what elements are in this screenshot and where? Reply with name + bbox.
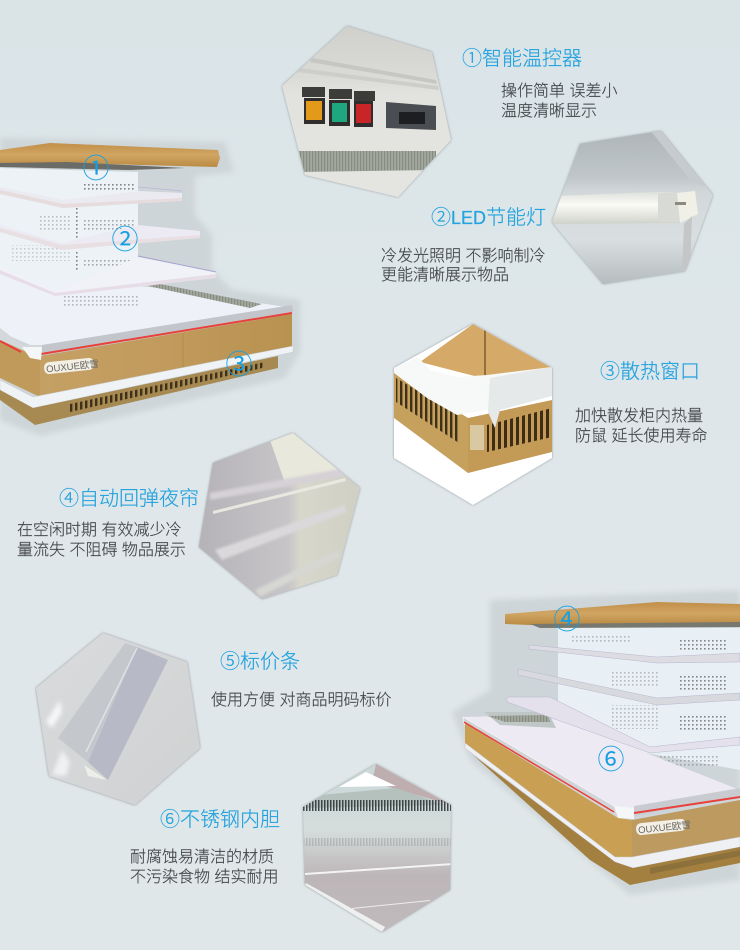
- cabinet photo: right view with markers 4, 6: ⑥: [598, 745, 624, 775]
- cabinet photo: left view with markers 1, 2, 3: ①: [82, 154, 110, 184]
- photo hexagon 3: gold vented heat-dissipation corner: [392, 322, 554, 507]
- feature 2: LED energy-saving light: 冷发光照明 不影响制冷: [381, 247, 545, 265]
- photo hexagon 4: self-rebounding night curtain: [196, 430, 364, 602]
- cabinet photo: left view with markers 1, 2, 3: ②: [112, 225, 138, 255]
- logo: OUXUE: OUXUE欧雪: [46, 358, 99, 375]
- photo hexagon 1: thermostat control panel: [280, 24, 455, 199]
- feature 2: LED energy-saving light: 更能清晰展示物品: [381, 266, 509, 284]
- feature 3: heat dissipation vent: [575, 360, 707, 445]
- feature 4: self-rebounding night curtain: [17, 487, 199, 559]
- digital temperature controller: [386, 102, 436, 130]
- feature 3: heat dissipation vent: 加快散发柜内热量: [575, 407, 703, 425]
- feature 5: price tag strip: ⑤标价条: [220, 650, 300, 673]
- feature 4: self-rebounding night curtain: 在空闲时期 有效减少冷: [17, 521, 181, 539]
- photo hexagon 5: price tag strip: [34, 630, 204, 808]
- cabinet photo: right view with markers 4, 6: [452, 590, 740, 895]
- feature 6: stainless steel liner: ⑥不锈钢内胆: [160, 808, 280, 831]
- feature 1: smart thermostat: 操作简单 误差小: [501, 82, 617, 100]
- feature 1: smart thermostat: ①智能温控器: [462, 47, 582, 70]
- feature 3: heat dissipation vent: 防鼠 延长使用寿命: [575, 427, 707, 445]
- cabinet photo: left view with markers 1, 2, 3: ③: [226, 350, 252, 380]
- feature 6: stainless steel liner: 不污染食物 结实耐用: [130, 868, 278, 886]
- feature 1: smart thermostat: [462, 47, 617, 120]
- cabinet photo: right view with markers 4, 6: ④: [554, 605, 580, 635]
- photo hexagon 6: stainless steel inner liner: [300, 762, 455, 934]
- feature 6: stainless steel liner: [130, 808, 280, 886]
- cabinet photo: left view with markers 1, 2, 3: [0, 138, 300, 436]
- feature 5: price tag strip: 使用方便 对商品明码标价: [211, 691, 391, 709]
- feature 2: LED energy-saving light: ②LED节能灯: [431, 206, 546, 229]
- photo hexagon 2: LED tube light: [550, 130, 715, 286]
- feature 3: heat dissipation vent: ③散热窗口: [600, 360, 700, 383]
- logo: OUXUE: OUXUE欧雪: [638, 819, 691, 836]
- feature 1: smart thermostat: 温度清晰显示: [501, 102, 597, 120]
- rocker switches: [302, 87, 375, 127]
- feature 6: stainless steel liner: 耐腐蚀易清洁的材质: [130, 848, 274, 866]
- feature 5: price tag strip: [211, 650, 391, 709]
- feature 2: LED energy-saving light: [381, 206, 546, 284]
- feature 4: self-rebounding night curtain: 量流失 不阻碍 物品展示: [17, 541, 186, 559]
- feature 4: self-rebounding night curtain: ④自动回弹夜帘: [59, 487, 199, 510]
